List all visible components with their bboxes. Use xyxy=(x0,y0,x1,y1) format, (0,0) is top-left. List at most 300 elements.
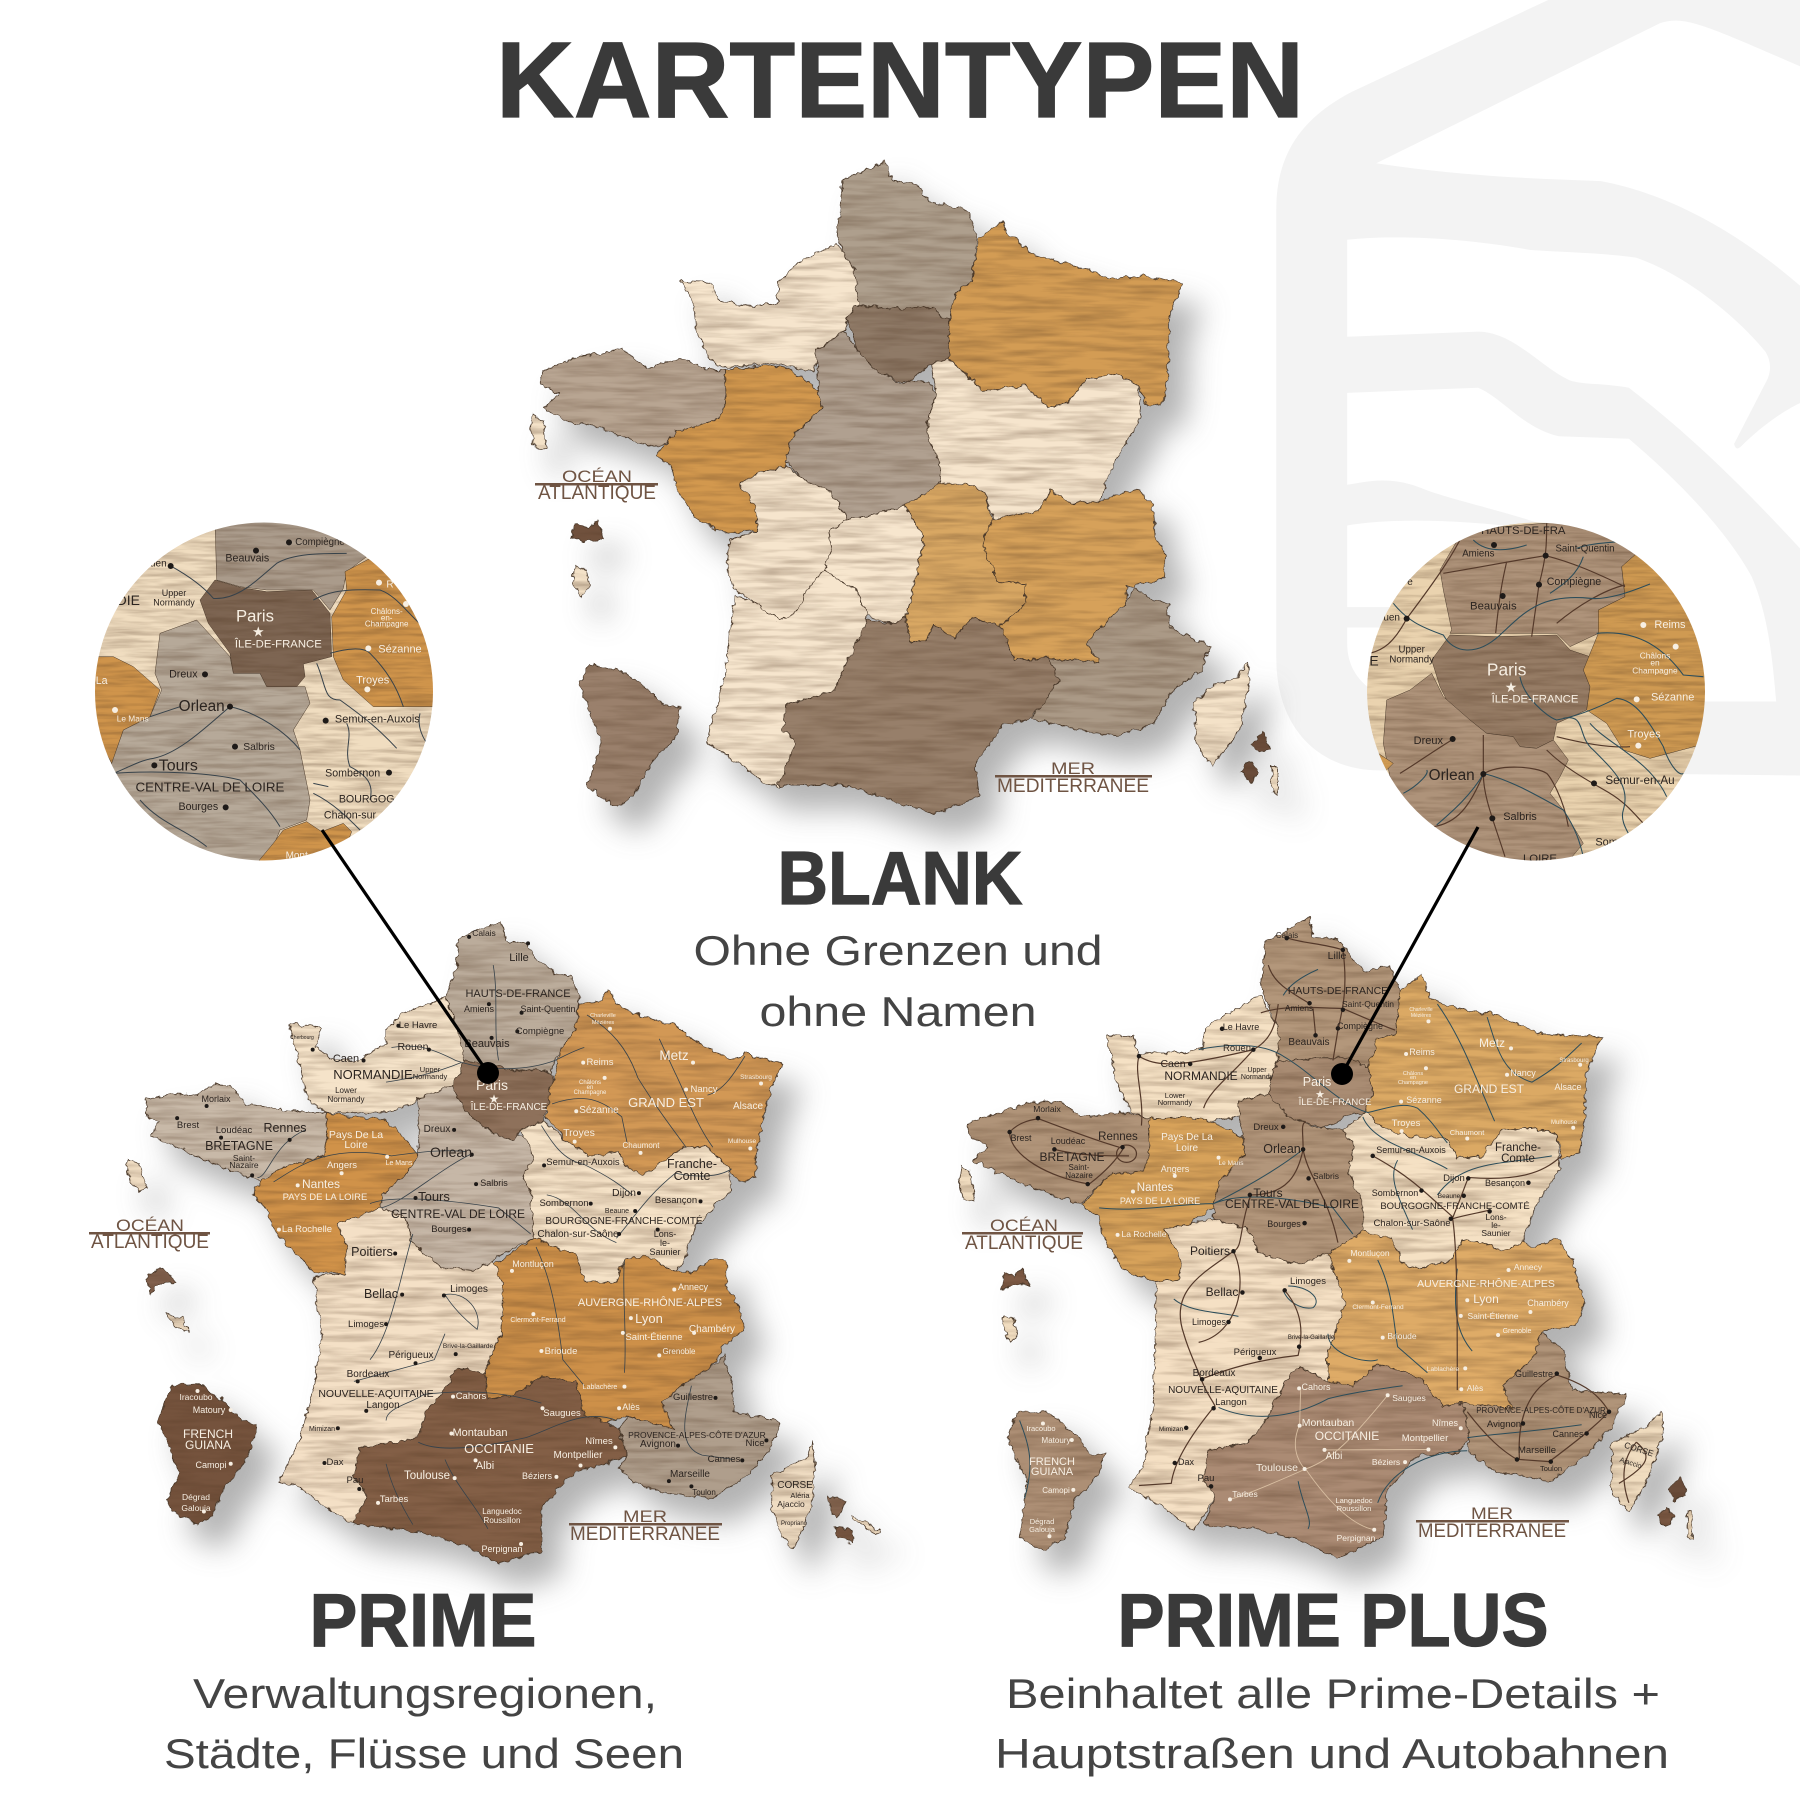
prime plus place names: Cahors xyxy=(1301,1382,1331,1392)
prime plus place names: Chaumont xyxy=(1450,1128,1485,1137)
prime plus place names: Dreux xyxy=(1253,1122,1279,1133)
prime place names: Limoges xyxy=(450,1284,488,1295)
prime place names: Saint- xyxy=(233,1153,255,1163)
prime plus place names: Franche- xyxy=(1495,1142,1541,1154)
prime plus place names: Nancy xyxy=(1510,1068,1536,1078)
prime place names: Matoury xyxy=(193,1405,226,1415)
prime place names: Lablachère xyxy=(583,1384,617,1391)
prime place names: PAYS DE LA LOIRE xyxy=(283,1192,367,1203)
prime place names: Languedoc xyxy=(482,1507,522,1516)
prime place names: Camopi xyxy=(195,1460,227,1470)
prime plus place names: La Rochelle xyxy=(1122,1229,1167,1239)
prime place names: PROVENCE-ALPES-CÔTE D'AZUR xyxy=(628,1430,766,1440)
label: Océan Atlantique xyxy=(962,1216,1083,1254)
prime plus detail lines and labels xyxy=(1369,523,1703,865)
prime place names: Poitiers xyxy=(351,1245,393,1259)
prime plus place names: Saugues xyxy=(1392,1393,1426,1403)
magnifier circle: prime plus detail xyxy=(1367,520,1707,865)
prime plus place names: Ajaccio xyxy=(1619,1457,1642,1470)
description: prime plus: Beinhaltet alle Prime-Details + xyxy=(1006,1670,1660,1717)
prime plus detail lines and labels: E xyxy=(1369,653,1379,669)
prime plus place names xyxy=(1010,931,1655,1543)
prime plus place names: Tours xyxy=(1253,1186,1283,1200)
prime place names: Rouen xyxy=(398,1041,429,1053)
prime plus place names: AUVERGNE-RHÔNE-ALPES xyxy=(1417,1277,1555,1290)
prime plus place names: Guillestre xyxy=(1515,1369,1553,1379)
prime plus place names: NOUVELLE-AQUITAINE xyxy=(1168,1385,1278,1396)
label: Océan Atlantique: OCÉAN xyxy=(562,467,632,486)
prime place names: Alès xyxy=(622,1402,640,1412)
label: Mer Méditerranée xyxy=(569,1507,722,1545)
prime place names: Iracoubo xyxy=(179,1392,213,1402)
prime plus place names: Chalon-sur-Saône xyxy=(1373,1218,1451,1229)
prime plus detail lines and labels: ★ xyxy=(1505,679,1517,695)
prime detail lines and labels: Paris xyxy=(236,607,274,626)
prime plus place names: Montauban xyxy=(1302,1417,1354,1429)
prime plus place names: Lyon xyxy=(1473,1292,1499,1306)
prime plus place names: PAYS DE LA LOIRE xyxy=(1120,1196,1200,1206)
prime plus detail lines and labels: Amiens xyxy=(1462,549,1495,560)
prime place names: OCCITANIE xyxy=(464,1441,534,1456)
prime plus detail lines and labels: Saint-Quentin xyxy=(1555,544,1615,555)
prime plus detail lines and labels: Orlean xyxy=(1429,767,1475,784)
prime place names: Bordeaux xyxy=(347,1369,389,1380)
prime plus place names: Dijon xyxy=(1443,1173,1465,1184)
prime place names: Brest xyxy=(177,1120,199,1131)
heading: prime: PRIME xyxy=(310,1578,536,1662)
prime detail lines and labels: ÎLE-DE-FRANCE xyxy=(234,637,322,650)
prime place names: Mézières xyxy=(592,1020,614,1026)
prime detail lines and labels: Sézanne xyxy=(378,644,422,656)
prime place names: Lyon xyxy=(635,1311,663,1326)
prime plus place names: Cannes xyxy=(1552,1429,1584,1439)
prime place names: BRETAGNE xyxy=(205,1139,273,1153)
description: prime xyxy=(164,1670,684,1777)
prime place names: Périgueux xyxy=(388,1350,434,1361)
prime place names: Nancy xyxy=(691,1084,718,1095)
label: Océan Atlantique: OCÉAN xyxy=(990,1216,1058,1235)
prime plus place names: Rennes xyxy=(1098,1131,1138,1143)
prime detail lines and labels: CENTRE-VAL DE LOIRE xyxy=(136,780,285,795)
prime plus place names: Langon xyxy=(1215,1397,1247,1408)
prime place names: ÎLE-DE-FRANCE xyxy=(470,1100,548,1113)
prime plus map wood regions xyxy=(959,917,1692,1558)
prime plus detail lines and labels: Champagne xyxy=(1632,665,1678,675)
prime place names: Montluçon xyxy=(512,1259,554,1269)
prime place names: Limoges xyxy=(348,1319,384,1330)
label: Mer Méditerranée: MER xyxy=(1471,1504,1513,1523)
prime plus place names: Le Havre xyxy=(1223,1022,1259,1032)
prime plus place names: Saunier xyxy=(1481,1228,1511,1238)
label: Mer Méditerranée xyxy=(995,759,1152,797)
prime plus place names: Saint-Quentin xyxy=(1342,999,1394,1009)
prime detail lines and labels: ★ xyxy=(252,623,265,639)
prime map wood regions xyxy=(126,923,880,1564)
prime place names: Albi xyxy=(476,1460,494,1472)
prime place names: HAUTS-DE-FRANCE xyxy=(465,988,571,1000)
prime place names: Sombernon xyxy=(539,1198,589,1209)
prime place names: Compiègne xyxy=(516,1026,564,1037)
prime plus place names: Lons- xyxy=(1485,1212,1507,1222)
prime detail lines and labels: Normandy xyxy=(153,597,195,607)
prime plus place names: Avignon xyxy=(1487,1419,1521,1430)
prime place names: Grenoble xyxy=(663,1347,696,1356)
prime place names: Montpellier xyxy=(554,1450,603,1461)
prime plus place names: Le Mans xyxy=(1219,1160,1244,1167)
prime place names: Comte xyxy=(674,1169,710,1183)
heading: blank: BLANK xyxy=(778,836,1022,920)
prime plus place names: Bellac xyxy=(1206,1285,1238,1299)
prime place names: Caen xyxy=(333,1053,359,1065)
prime place names: Aléria xyxy=(790,1491,810,1500)
prime plus place names: Saint-Étienne xyxy=(1467,1311,1519,1321)
label: Mer Méditerranée: MÉDITERRANÉE xyxy=(1418,1521,1566,1542)
prime detail lines and labels: Upper xyxy=(162,588,186,598)
prime plus place names: BOURGOGNE-FRANCHE-COMTÉ xyxy=(1380,1201,1530,1212)
prime place names: Roussillon xyxy=(484,1516,520,1525)
prime detail lines and labels: Salbris xyxy=(243,742,275,753)
prime plus place names: ÎLE-DE-FRANCE xyxy=(1298,1097,1371,1108)
prime place names: Tours xyxy=(418,1189,450,1204)
prime plus place names: CENTRE-VAL DE LOIRE xyxy=(1225,1197,1359,1211)
prime place names: Bourges xyxy=(431,1224,467,1235)
prime plus place names: Troyes xyxy=(1392,1118,1421,1129)
prime plus place names: Semur-en-Auxois xyxy=(1376,1145,1446,1155)
prime place names: CORSE xyxy=(777,1480,813,1491)
prime plus place names: Lower xyxy=(1165,1091,1186,1100)
prime plus place names: Champagne xyxy=(1398,1080,1428,1086)
prime plus place names: Bourges xyxy=(1267,1219,1301,1229)
description: prime: Verwaltungsregionen, xyxy=(193,1670,657,1717)
prime place names: Loudéac xyxy=(216,1125,252,1136)
blank map wood regions xyxy=(530,161,1278,814)
prime plus place names: BRETAGNE xyxy=(1039,1150,1105,1164)
prime plus place names: Amiens xyxy=(1285,1003,1313,1013)
prime plus place names: Normandy xyxy=(1158,1098,1193,1107)
label: Océan Atlantique: OCÉAN xyxy=(116,1216,184,1235)
prime place names: CENTRE-VAL DE LOIRE xyxy=(391,1207,525,1221)
prime plus place names: Calais xyxy=(1276,931,1298,940)
prime plus place names: Clermont-Ferrand xyxy=(1352,1304,1404,1311)
prime plus place names: Upper xyxy=(1247,1067,1267,1074)
prime plus place names: Besançon xyxy=(1485,1178,1525,1188)
prime detail regions xyxy=(93,520,433,863)
prime place names: en xyxy=(587,1085,593,1091)
prime plus place names: Lablachère xyxy=(1427,1366,1459,1373)
description: blank xyxy=(694,927,1102,1035)
watermark logo xyxy=(1276,0,1800,776)
prime plus detail lines and labels: uen xyxy=(1383,613,1400,624)
prime plus detail lines and labels: Troyes xyxy=(1627,728,1661,740)
prime detail lines and labels: Bourges xyxy=(178,801,218,813)
prime place names: ★ xyxy=(489,1092,499,1106)
prime plus place names: Brioude xyxy=(1387,1331,1417,1341)
prime plus place names: Poitiers xyxy=(1190,1244,1230,1258)
prime place names: Nîmes xyxy=(585,1436,613,1447)
prime plus place names: Lille xyxy=(1328,950,1346,962)
prime place names: Salbris xyxy=(480,1178,508,1188)
prime plus place names: Roussillon xyxy=(1337,1504,1371,1513)
prime place names: Champagne xyxy=(574,1090,607,1096)
prime plus place names: Montluçon xyxy=(1350,1248,1390,1258)
prime plus place names: Sézanne xyxy=(1406,1095,1442,1105)
prime plus place names: Matoury xyxy=(1042,1436,1070,1445)
prime plus place names: Limoges xyxy=(1290,1276,1326,1287)
description: prime: Städte, Flüsse und Seen xyxy=(164,1730,684,1777)
prime plus place names: Rouen xyxy=(1223,1043,1251,1054)
prime plus place names: Pau xyxy=(1198,1473,1214,1484)
prime plus place names: Loire xyxy=(1176,1143,1199,1154)
prime place names: Cahors xyxy=(456,1391,487,1402)
label: Océan Atlantique xyxy=(89,1216,210,1253)
prime place names: Saunier xyxy=(649,1247,681,1257)
prime plus place names: en xyxy=(1410,1075,1416,1081)
prime plus place names: ★ xyxy=(1315,1089,1325,1101)
prime plus place names: Metz xyxy=(1479,1036,1505,1050)
prime place names: Nice xyxy=(745,1438,765,1449)
prime detail lines and labels xyxy=(96,537,433,861)
description: prime plus xyxy=(995,1670,1669,1777)
prime plus place names: Caen xyxy=(1160,1058,1186,1070)
prime place names: Propriano xyxy=(781,1521,808,1527)
prime place names: Pays De La xyxy=(329,1129,383,1141)
prime place names: Le Havre xyxy=(399,1020,437,1031)
prime detail lines and labels: Le Mans xyxy=(117,713,149,723)
prime plus place names: Perpignan xyxy=(1337,1533,1376,1543)
prime place names: Lower xyxy=(335,1086,357,1095)
prime rivers and cities xyxy=(177,937,766,1544)
prime place names: Reims xyxy=(587,1057,614,1068)
label: Mer Méditerranée: MÉDITERRANÉE xyxy=(570,1524,720,1545)
prime detail lines and labels: en- xyxy=(381,614,393,623)
prime plus place names: Camopi xyxy=(1042,1486,1070,1495)
prime place names: Angers xyxy=(327,1160,357,1171)
prime plus place names: Nice xyxy=(1589,1410,1607,1420)
prime plus place names: Brest xyxy=(1010,1133,1032,1143)
prime place names: Calais xyxy=(472,928,496,938)
prime plus place names: Tarbes xyxy=(1232,1489,1258,1499)
prime place names: NOUVELLE-AQUITAINE xyxy=(318,1388,434,1400)
prime place names: Châlons xyxy=(579,1080,601,1086)
magnifier circle: prime detail xyxy=(93,520,433,863)
prime plus place names: le- xyxy=(1491,1220,1501,1230)
prime plus place names: Iracoubo xyxy=(1026,1424,1056,1433)
prime place names: Morlaix xyxy=(201,1094,231,1104)
prime plus place names: Nîmes xyxy=(1432,1418,1458,1428)
prime plus place names: Limoges xyxy=(1192,1317,1227,1327)
prime plus place names: PROVENCE-ALPES-CÔTE D'AZUR xyxy=(1476,1406,1606,1415)
prime detail lines and labels: Compiègne xyxy=(295,537,345,548)
prime plus detail lines and labels: Beauvais xyxy=(1470,600,1517,612)
prime detail lines and labels: Troyes xyxy=(356,674,390,686)
prime plus place names: Comte xyxy=(1501,1153,1535,1165)
prime plus place names: Alès xyxy=(1467,1383,1483,1393)
prime place names: le- xyxy=(660,1238,670,1248)
prime place names: Dijon xyxy=(612,1187,636,1199)
prime plus place names: Marseille xyxy=(1518,1445,1556,1456)
prime plus place names: Toulon xyxy=(1540,1464,1562,1473)
prime plus place names: Reims xyxy=(1409,1047,1435,1057)
prime place names: Paris xyxy=(476,1077,508,1093)
prime plus place names: Sombernon xyxy=(1372,1188,1418,1198)
prime plus place names: Périgueux xyxy=(1234,1347,1277,1358)
prime place names: Guillestre xyxy=(673,1392,713,1403)
prime place names: Amiens xyxy=(464,1004,495,1014)
prime place names: BOURGOGNE-FRANCHE-COMTÉ xyxy=(545,1214,703,1227)
prime place names: Brioude xyxy=(545,1346,577,1357)
prime plus place names: Brive-la-Gaillarde xyxy=(1288,1335,1335,1341)
prime place names: Chalon-sur-Saône xyxy=(537,1229,619,1240)
prime plus place names: Mézières xyxy=(1411,1013,1432,1019)
prime place names: Strasbourg xyxy=(740,1074,772,1081)
prime plus place names: Languedoc xyxy=(1335,1496,1373,1505)
prime plus place names: Alsace xyxy=(1554,1082,1582,1092)
prime detail lines and labels: BOURGOG xyxy=(339,794,394,806)
prime plus place names: Charleville xyxy=(1409,1007,1433,1013)
prime plus place names: Compiègne xyxy=(1337,1021,1383,1031)
description: blank: Ohne Grenzen und xyxy=(694,927,1102,974)
description: prime plus: Hauptstraßen und Autobahnen xyxy=(995,1730,1669,1777)
prime place names: GRAND EST xyxy=(628,1095,704,1110)
map: prime xyxy=(89,923,880,1564)
title: KARTENTYPEN xyxy=(496,19,1304,140)
prime place names: Normandy xyxy=(413,1072,448,1081)
prime place names: Dreux xyxy=(424,1124,450,1135)
prime place names: Le Mans xyxy=(386,1160,413,1167)
prime plus place names: OCCITANIE xyxy=(1315,1429,1379,1443)
map: prime plus xyxy=(959,917,1692,1558)
prime place names: NORMANDIE xyxy=(333,1067,413,1082)
prime plus place names: Beauvais xyxy=(1288,1037,1330,1048)
prime plus place names: Dégrad xyxy=(1030,1517,1054,1526)
prime plus place names: Chambéry xyxy=(1527,1298,1569,1308)
prime plus place names: Bordeaux xyxy=(1193,1368,1235,1379)
map: blank xyxy=(530,161,1278,814)
connector: prime plus circle to Île-de-France xyxy=(1331,827,1478,1085)
prime place names: Troyes xyxy=(563,1127,595,1139)
prime place names: Rennes xyxy=(263,1121,307,1135)
prime place names: Ajaccio xyxy=(777,1499,805,1509)
prime place names: La Rochelle xyxy=(282,1224,332,1235)
prime detail lines and labels: Semur-en-Auxois xyxy=(335,714,420,726)
prime plus place names: Albi xyxy=(1326,1451,1342,1462)
prime place names: Sézanne xyxy=(579,1105,619,1116)
prime plus detail lines and labels: HAUTS-DE-FRA xyxy=(1481,525,1566,537)
prime plus place names: Orlean xyxy=(1263,1142,1301,1156)
prime place names xyxy=(177,928,813,1554)
prime place names: Beauvais xyxy=(464,1038,510,1050)
prime place names: Tarbes xyxy=(380,1494,409,1505)
prime plus place names: CORSE xyxy=(1623,1440,1655,1459)
prime plus place names: Montpellier xyxy=(1402,1433,1448,1444)
prime place names: Mimizan xyxy=(309,1426,335,1433)
prime place names: Marseille xyxy=(670,1469,710,1480)
prime plus detail regions xyxy=(1367,520,1707,863)
prime place names: FRENCH xyxy=(183,1427,233,1441)
prime detail lines and labels: Orlean xyxy=(179,698,225,715)
prime place names: Metz xyxy=(659,1048,689,1063)
label: Océan Atlantique: ATLANTIQUE xyxy=(965,1233,1083,1254)
prime plus place names: Mimizan xyxy=(1159,1426,1183,1433)
prime plus place names: Grenoble xyxy=(1503,1328,1532,1335)
prime detail lines and labels: Châlons- xyxy=(371,607,403,616)
prime plus place names: Mulhouse xyxy=(1551,1120,1578,1126)
prime place names: Semur-en-Auxois xyxy=(546,1157,620,1168)
prime plus detail lines and labels: Compiègne xyxy=(1547,576,1601,588)
prime place names: Franche- xyxy=(667,1157,717,1171)
prime place names: Bellac xyxy=(364,1287,398,1301)
prime detail lines and labels: Champagne xyxy=(365,620,409,629)
prime place names: Upper xyxy=(420,1065,441,1074)
prime plus detail lines and labels: Upper xyxy=(1399,645,1426,656)
prime plus detail lines and labels: Paris xyxy=(1487,660,1527,680)
prime detail lines and labels: R xyxy=(386,579,394,590)
prime detail lines and labels: Mont xyxy=(286,850,308,861)
description: blank: ohne Namen xyxy=(760,988,1036,1035)
prime plus place names: Salbris xyxy=(1313,1171,1339,1181)
prime place names: Charleville xyxy=(590,1013,616,1019)
prime plus place names: GUIANA xyxy=(1031,1466,1074,1478)
prime plus place names: Châlons xyxy=(1403,1071,1423,1077)
prime detail lines and labels: DIE xyxy=(117,592,140,608)
prime place names: Clermont-Ferrand xyxy=(510,1317,566,1324)
prime place names: Nazaire xyxy=(229,1160,259,1170)
prime plus place names: Saint- xyxy=(1069,1163,1090,1172)
prime plus place names: Normandy xyxy=(1241,1074,1274,1081)
prime place names: Avignon xyxy=(640,1439,676,1450)
prime place names: Saint-Quentin xyxy=(520,1004,576,1014)
prime plus place names: Morlaix xyxy=(1033,1104,1061,1114)
label: Océan Atlantique xyxy=(535,467,658,504)
prime plus detail lines and labels: Reims xyxy=(1654,619,1686,631)
prime plus place names: Dax xyxy=(1178,1457,1194,1467)
prime plus detail lines and labels: LOIRE xyxy=(1523,853,1557,865)
prime plus place names: Paris xyxy=(1303,1075,1331,1089)
prime place names: Lons- xyxy=(654,1229,676,1239)
connector: prime circle to Île-de-France xyxy=(322,830,499,1084)
prime plus detail lines and labels: Sézanne xyxy=(1651,692,1694,704)
prime detail lines and labels: Sombernon xyxy=(325,768,380,780)
prime plus place names: Nantes xyxy=(1137,1182,1173,1194)
label: Mer Méditerranée: MER xyxy=(1051,759,1095,778)
prime detail lines and labels: La xyxy=(96,675,108,687)
prime place names: Chambéry xyxy=(689,1324,735,1335)
prime place names: Pau xyxy=(347,1475,363,1486)
prime detail lines and labels: uen xyxy=(150,559,167,570)
prime place names: Dax xyxy=(327,1457,344,1468)
prime place names: Perpignan xyxy=(481,1544,523,1554)
prime plus place names: FRENCH xyxy=(1029,1456,1075,1468)
prime plus place names: Beaune xyxy=(1438,1193,1461,1200)
prime plus detail lines and labels: en xyxy=(1650,657,1660,667)
prime plus place names: Nazaire xyxy=(1065,1171,1093,1180)
prime plus place names: Angers xyxy=(1161,1164,1190,1174)
prime place names: Dégrad xyxy=(182,1492,210,1502)
label: Mer Méditerranée: MÉDITERRANÉE xyxy=(997,776,1149,797)
prime plus roads, rivers and cities xyxy=(1010,938,1646,1536)
prime plus place names: Strasbourg xyxy=(1559,1058,1589,1064)
prime place names: Loire xyxy=(344,1139,368,1151)
label: Mer Méditerranée xyxy=(1416,1504,1569,1542)
prime detail lines and labels: Tours xyxy=(159,758,198,775)
prime place names: Alsace xyxy=(733,1101,763,1112)
label: Océan Atlantique: ATLANTIQUE xyxy=(91,1232,209,1253)
prime place names: Brive-la-Gaillarde xyxy=(443,1343,493,1350)
prime place names: Annecy xyxy=(678,1282,709,1292)
label: Mer Méditerranée: MER xyxy=(623,1507,667,1526)
prime plus detail lines and labels: Dreux xyxy=(1414,735,1443,747)
prime place names: Béziers xyxy=(522,1471,553,1481)
